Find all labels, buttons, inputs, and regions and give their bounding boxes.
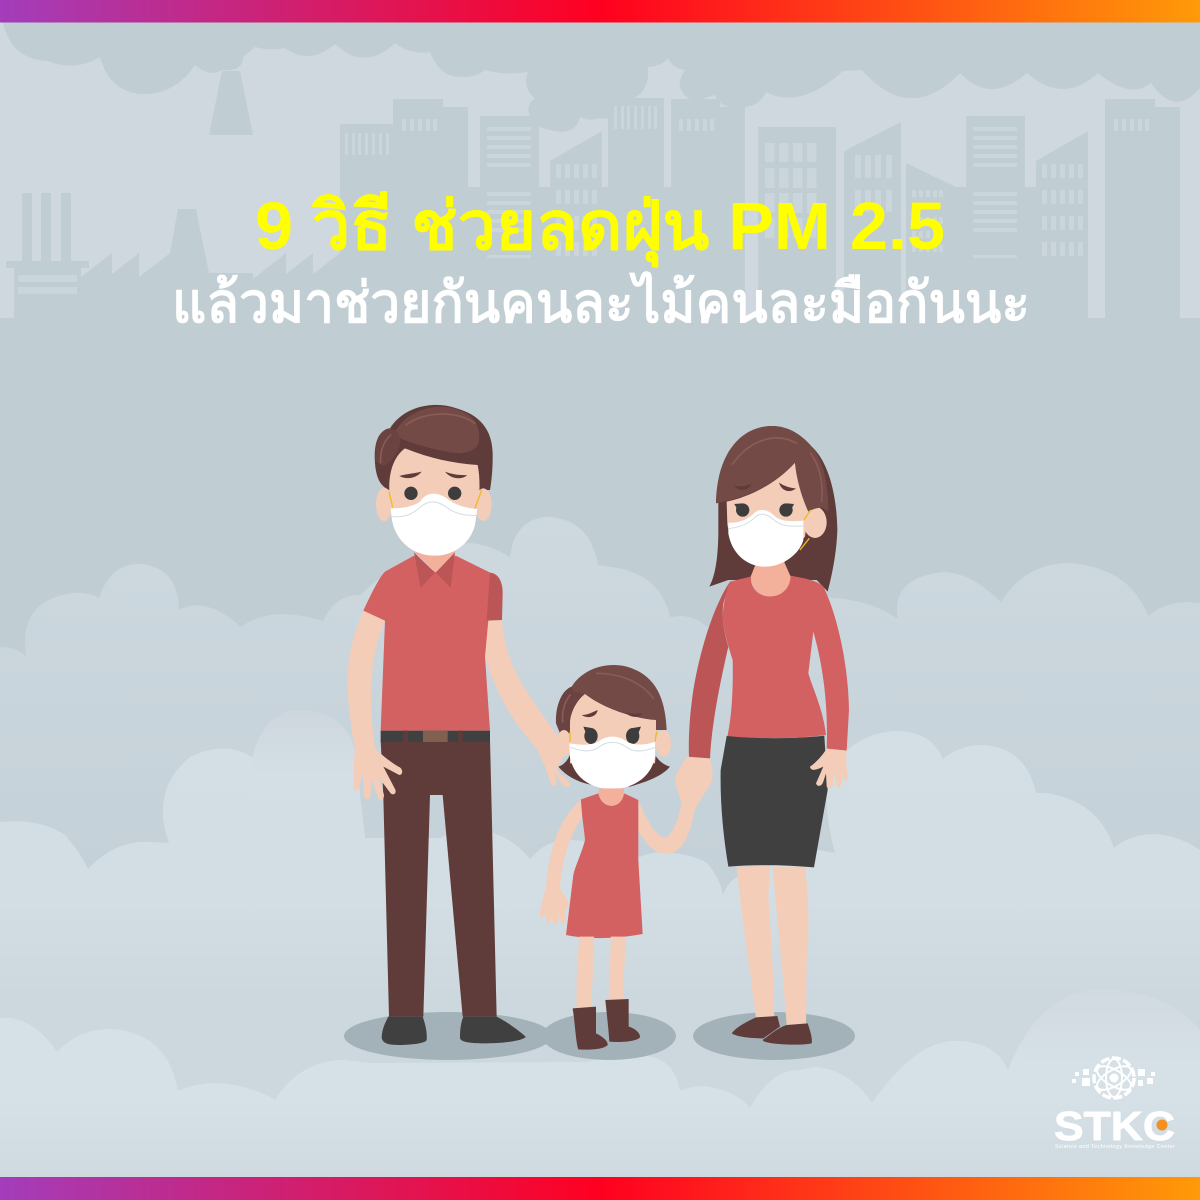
buildings silhouette [0, 98, 1200, 330]
subtitle: แล้วมาช่วยกันคนละไม้คนละมือกันนะ [172, 271, 1030, 334]
building windows [18, 106, 1149, 294]
back cloud layer [0, 517, 1200, 1177]
girl hair back [558, 755, 670, 787]
man hair top [395, 407, 479, 453]
man eyebrows [399, 472, 467, 478]
smog cloud top [0, 22, 1200, 132]
man shirt [363, 556, 492, 731]
man right arm and hand [485, 620, 570, 787]
woman arm [689, 582, 730, 759]
man shirt sleeve [487, 573, 503, 621]
girl dress [566, 793, 643, 938]
man eyes [404, 487, 461, 500]
logo: STKC [1054, 1058, 1175, 1150]
woman shoes [732, 1016, 812, 1045]
woman eyes [734, 503, 794, 517]
logo caption: Science and Technology Knowledge Center [1055, 1144, 1175, 1150]
woman ear [803, 507, 827, 538]
woman neck [751, 562, 791, 597]
bottom gradient bar [0, 1177, 1200, 1200]
logo wordmark: STKC [1054, 1103, 1175, 1149]
woman top [723, 576, 849, 751]
man hair back [375, 405, 493, 490]
man collar [414, 552, 455, 588]
girl mask straps [570, 732, 657, 742]
man neck [415, 547, 455, 573]
figure: man [347, 405, 570, 1045]
woman eyebrows [734, 483, 796, 491]
man mask straps [389, 490, 482, 508]
girl neck [598, 788, 624, 806]
woman skirt [721, 736, 828, 867]
logo atom icon [1094, 1058, 1134, 1098]
logo pixel squares [1072, 1069, 1155, 1086]
woman legs [737, 866, 808, 1025]
front cloud layer [0, 990, 1200, 1177]
girl left arm [540, 800, 582, 925]
top gradient bar [0, 0, 1200, 22]
girl face [570, 694, 657, 763]
woman mask straps [800, 510, 811, 550]
woman hair back [709, 426, 837, 592]
girl right arm and joined hand [638, 757, 712, 854]
faded front cloud lobe [1008, 990, 1200, 1075]
girl eyes [583, 727, 641, 744]
ground shadows [344, 1012, 855, 1060]
girl mask [569, 737, 655, 789]
figure: woman [689, 426, 849, 1045]
woman hand [810, 749, 848, 788]
girl eyebrows [582, 710, 643, 717]
girl boots [573, 999, 640, 1050]
man mask [391, 494, 477, 556]
panel: polluted city skyline [0, 22, 1200, 330]
faded cloud lobe [252, 710, 358, 800]
man shoes [382, 1017, 526, 1045]
man trousers [381, 740, 497, 1017]
woman face [727, 463, 808, 563]
cooling tower stack [209, 71, 253, 135]
man left arm and hand [347, 611, 402, 800]
man ears [376, 488, 492, 521]
girl hair top [572, 665, 667, 730]
woman mask [728, 510, 803, 567]
figure: girl [540, 665, 712, 1050]
woman hair top [716, 426, 828, 512]
man belt [381, 731, 490, 742]
middle cloud layer [0, 731, 1200, 1177]
family illustration [347, 405, 849, 1050]
girl ears [557, 730, 671, 757]
main title: 9 วิธี ช่วยลดฝุ่น PM 2.5 [255, 189, 945, 268]
girl legs [576, 937, 626, 1008]
logo dot [1156, 1120, 1168, 1130]
man face [389, 448, 480, 552]
